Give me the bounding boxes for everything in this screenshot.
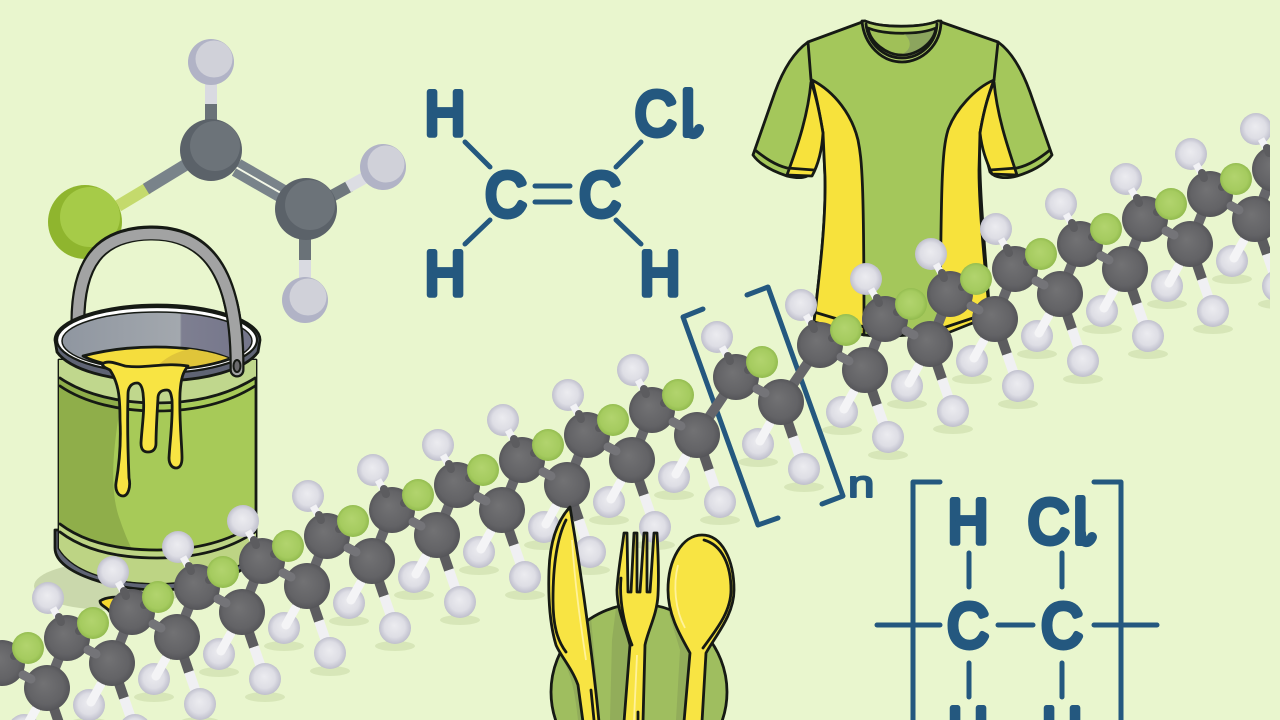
handle front right — [222, 300, 244, 378]
bond: carbon to chlorine — [118, 164, 187, 206]
band lines — [60, 378, 255, 558]
bucket interior — [62, 312, 252, 370]
bucket body — [59, 360, 256, 583]
handle pivot — [234, 360, 240, 372]
paint surface shade — [155, 349, 228, 368]
bond: carbon to bottom hydrogen — [299, 238, 311, 280]
chain backbone bonds — [47, 169, 1275, 688]
T-shirt — [753, 21, 1052, 336]
collar — [862, 21, 941, 62]
cutlery shadows on plate — [560, 600, 690, 720]
formula bonds — [465, 142, 641, 244]
bonds — [877, 553, 1157, 697]
rim white ring — [57, 307, 257, 373]
plastic cutlery — [549, 507, 734, 720]
bucket ground shadow — [34, 562, 186, 610]
paint drips — [102, 362, 188, 496]
shirt body — [753, 21, 1052, 336]
atom labels: C — [947, 591, 989, 661]
atom labels: C — [485, 160, 527, 230]
atom: carbon one — [180, 119, 242, 181]
atom labels: C — [635, 79, 676, 149]
atom labels: H — [640, 240, 680, 309]
seams and cuffs — [755, 42, 1050, 329]
atom labels — [947, 487, 1087, 720]
structural formula: vinyl chloride — [425, 79, 699, 309]
fork — [617, 533, 658, 720]
atom: chlorine — [48, 185, 122, 259]
chlorine l hook — [1081, 533, 1092, 542]
atom labels — [425, 79, 694, 309]
atom labels: l — [1074, 487, 1087, 557]
atom labels: C — [579, 160, 621, 230]
chain shadows — [69, 274, 1280, 720]
double bond between carbons — [234, 163, 286, 199]
green plate — [551, 604, 727, 720]
subscript n: n — [848, 463, 874, 506]
atom: hydrogen top — [188, 39, 234, 85]
square brackets — [913, 482, 1121, 720]
right underarm yellow — [980, 82, 1017, 175]
atom labels: H — [948, 488, 988, 557]
paint surface — [83, 347, 228, 369]
bond: carbon to top hydrogen — [205, 84, 217, 128]
knife — [549, 507, 599, 720]
rim — [55, 305, 260, 381]
atom: hydrogen right — [360, 144, 406, 190]
handle rear — [78, 233, 237, 370]
structural formula: PVC repeat unit — [877, 482, 1157, 720]
paint bucket — [34, 233, 260, 612]
spilled drop — [100, 597, 125, 612]
atom: hydrogen bottom — [282, 277, 328, 323]
lower band — [59, 525, 256, 583]
body shading — [59, 379, 150, 583]
atom labels: C — [1041, 591, 1083, 661]
bucket base — [55, 530, 256, 590]
vinyl chloride 3D molecule — [48, 39, 406, 323]
atom labels: H — [425, 240, 465, 309]
upper band — [59, 360, 256, 405]
atom labels: l — [682, 79, 694, 149]
atom labels: H — [425, 80, 465, 149]
left yellow panel — [812, 80, 864, 335]
left underarm yellow — [787, 82, 823, 176]
bracket of repeating unit — [683, 287, 874, 525]
chlorine l hook — [688, 125, 699, 134]
atom labels: C — [1028, 487, 1069, 557]
spoon — [668, 535, 734, 720]
right yellow panel — [940, 80, 994, 336]
atom: carbon two — [275, 178, 337, 240]
bond: carbon to right hydrogen — [330, 177, 366, 197]
